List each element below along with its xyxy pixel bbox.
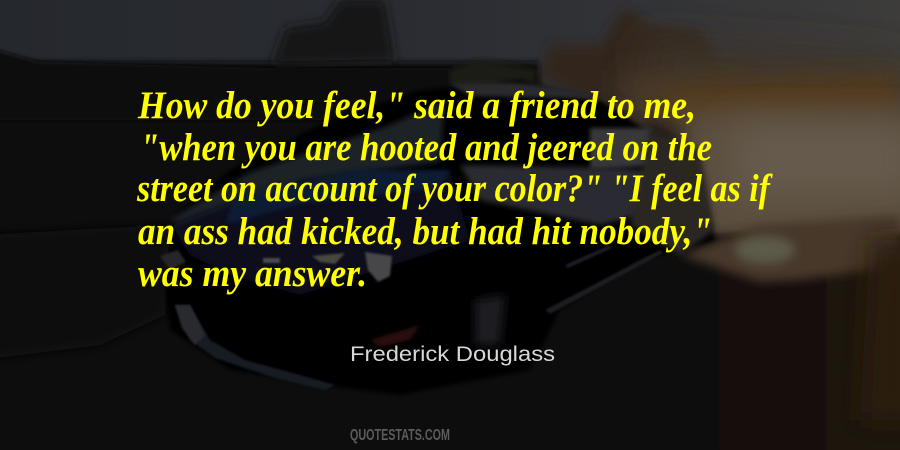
- quote text: "when you are hooted and jeered on the: [140, 126, 712, 169]
- quote text: How do you feel," said a friend to me,: [137, 84, 696, 127]
- quote text: was my answer.: [138, 252, 367, 295]
- car: [160, 80, 715, 395]
- quote text: [136, 84, 773, 295]
- author name: Frederick Douglass: [350, 343, 555, 366]
- watermark: QUOTESTATS.COM: [350, 427, 450, 444]
- quote text: an ass had kicked, but had hit nobody,": [138, 210, 712, 253]
- quote text: street on account of your color?" "I feel as if: [136, 167, 773, 210]
